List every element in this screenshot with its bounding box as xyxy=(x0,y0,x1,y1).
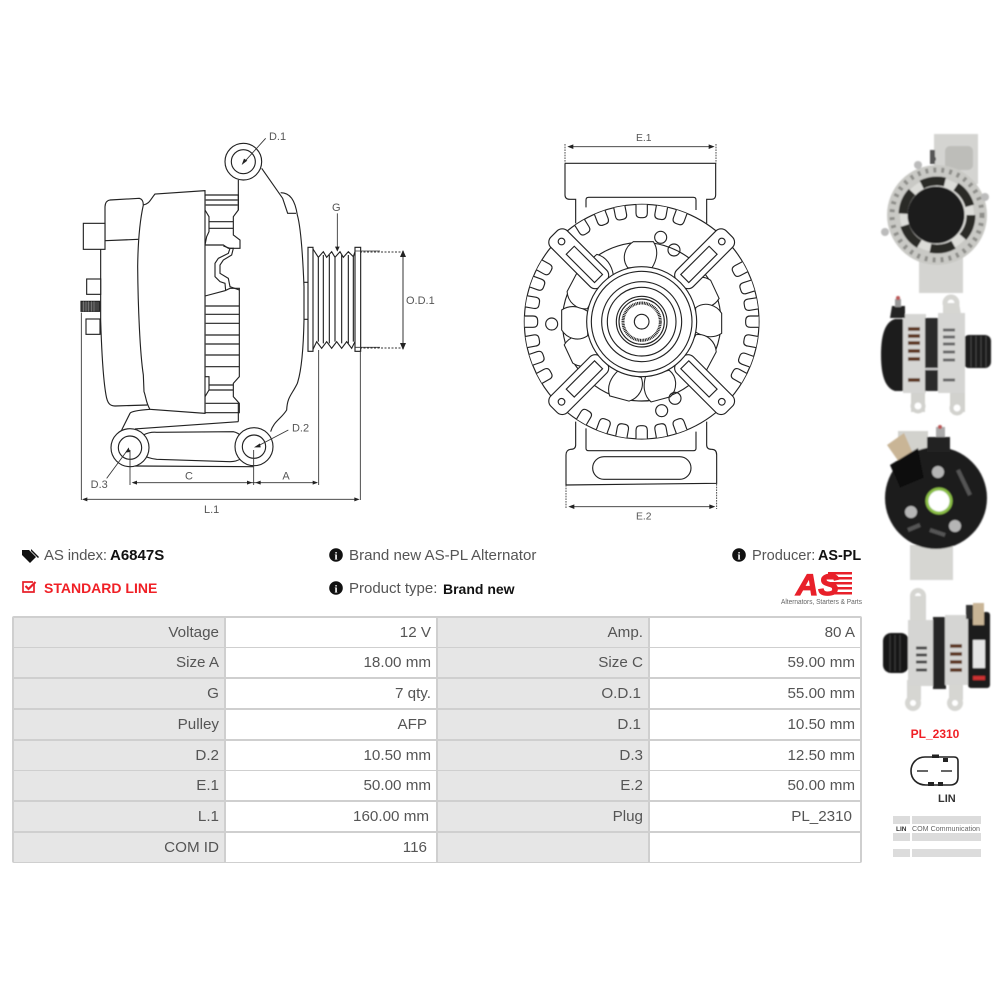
row: L.1 and plug: L.1 xyxy=(198,808,219,825)
side dimension labels: D.2 xyxy=(292,422,309,434)
icon: info product type: i xyxy=(334,584,338,596)
side dimension labels: D.1 xyxy=(269,131,286,143)
row: voltage and amperage: 12 V xyxy=(400,624,431,640)
product type xyxy=(349,580,515,597)
E.2 dimension: E.2 xyxy=(636,511,652,522)
side dimension labels xyxy=(91,131,341,516)
four mounting arms xyxy=(546,226,738,418)
rear cover xyxy=(101,198,147,406)
row: pulley and D.1: Pulley xyxy=(178,716,219,733)
row: E.1 and E.2 xyxy=(14,771,860,800)
pin function table: COM Communication xyxy=(912,824,980,833)
brand note: Brand new AS-PL Alternator xyxy=(349,547,536,564)
front view technical drawing xyxy=(524,133,759,522)
rear housing xyxy=(138,191,205,413)
logo: AS-PL: AS xyxy=(795,569,839,602)
photo: alternator opposite side view xyxy=(883,588,990,711)
dimension arrowheads xyxy=(82,159,360,501)
row: E.1 and E.2: 50.00 mm xyxy=(787,777,855,794)
row: pulley and D.1 xyxy=(14,710,860,739)
mounting eye D.3 xyxy=(111,429,149,467)
pulley xyxy=(304,247,361,351)
E.1 dimension: E.1 xyxy=(636,133,652,144)
logo: AS-PL: Alternators, Starters & Parts xyxy=(781,599,862,606)
side dimensions xyxy=(81,138,380,500)
row: pulley and D.1: D.1 xyxy=(617,716,641,733)
AS index xyxy=(44,547,164,564)
mounting eye D.1 xyxy=(225,143,262,180)
row: pulley and D.1: 10.50 mm xyxy=(787,716,855,733)
pin function table xyxy=(893,816,981,857)
plug pin label: LIN xyxy=(938,793,956,805)
row: pulley and D.1: AFP xyxy=(397,716,427,733)
row: E.1 and E.2: E.1 xyxy=(196,777,219,794)
mounting eye D.2 xyxy=(235,428,273,466)
row: D.2 and D.3 xyxy=(14,741,860,770)
row: voltage and amperage xyxy=(14,618,860,647)
row: voltage and amperage: Amp. xyxy=(608,624,643,640)
AS index: AS index: xyxy=(44,547,107,564)
stator fins xyxy=(205,195,240,413)
row: G and O.D.1: G xyxy=(207,685,219,702)
row: size A and size C: 59.00 mm xyxy=(787,654,855,671)
row: L.1 and plug xyxy=(14,802,860,831)
icon: info producer: i xyxy=(737,550,741,562)
E.1 dimension xyxy=(565,133,716,163)
row: L.1 and plug: Plug xyxy=(613,808,643,825)
row: E.1 and E.2: E.2 xyxy=(620,777,643,794)
row: size A and size C: 18.00 mm xyxy=(363,654,431,671)
end shield ring with notches xyxy=(524,204,759,439)
row: E.1 and E.2: 50.00 mm xyxy=(363,777,431,794)
specification table xyxy=(12,616,862,863)
front housing xyxy=(238,168,304,432)
bottom bracket xyxy=(566,422,717,485)
pulley hub circles xyxy=(587,267,697,377)
row: G and O.D.1: 55.00 mm xyxy=(787,685,855,702)
row: voltage and amperage: Voltage xyxy=(168,624,219,640)
row: D.2 and D.3: D.2 xyxy=(195,746,219,764)
ventilation holes xyxy=(546,231,681,417)
connectors and stud xyxy=(81,223,105,334)
icon: info producer xyxy=(732,548,746,562)
product type: Brand new xyxy=(443,581,515,597)
row: G and O.D.1: O.D.1 xyxy=(601,685,641,702)
O.D.1 dimension xyxy=(360,250,435,350)
row: size A and size C: Size A xyxy=(176,654,219,671)
row: COM ID: COM ID xyxy=(164,839,219,856)
row: size A and size C: Size C xyxy=(598,654,643,671)
pin function table: LIN xyxy=(896,826,907,833)
logo: AS-PL xyxy=(781,569,862,606)
icon: red checked box xyxy=(23,582,36,592)
row: D.2 and D.3: D.3 xyxy=(619,746,643,764)
side dimension labels: L.1 xyxy=(204,504,219,516)
side view technical drawing xyxy=(81,131,380,516)
photo: alternator rear view xyxy=(885,425,987,580)
side dimension labels: C xyxy=(185,470,193,482)
row: L.1 and plug: 160.00 mm xyxy=(353,808,429,825)
side dimension labels: D.3 xyxy=(91,479,108,491)
top bracket xyxy=(565,163,716,223)
row: D.2 and D.3: 10.50 mm xyxy=(363,746,431,764)
row: L.1 and plug: PL_2310 xyxy=(791,808,852,825)
E.2 dimension xyxy=(566,484,717,522)
fan window and blades xyxy=(562,242,722,403)
lower bracket xyxy=(122,409,253,467)
row: G and O.D.1: 7 qty. xyxy=(395,685,431,702)
row: voltage and amperage: 80 A xyxy=(825,624,855,640)
O.D.1 dimension: O.D.1 xyxy=(406,295,435,307)
row: COM ID: 116 xyxy=(403,839,427,856)
side dimension labels: A xyxy=(282,470,290,482)
AS index: A6847S xyxy=(110,547,164,564)
row: COM ID xyxy=(14,833,860,862)
row: D.2 and D.3: 12.50 mm xyxy=(787,746,855,764)
icon: tags xyxy=(22,549,39,563)
producer: Producer: xyxy=(752,548,815,564)
row: size A and size C xyxy=(14,648,860,677)
standard line: STANDARD LINE xyxy=(44,580,157,596)
icon: info brand: i xyxy=(334,550,338,562)
icon: info brand xyxy=(329,548,343,562)
side dimension labels: G xyxy=(332,202,341,214)
plug code: PL_2310 xyxy=(911,727,960,741)
photo: alternator side view xyxy=(881,294,991,416)
producer xyxy=(752,548,861,564)
row: G and O.D.1 xyxy=(14,679,860,708)
product type: Product type: xyxy=(349,580,437,597)
icon: plug connector xyxy=(911,754,958,786)
photo: alternator pulley end xyxy=(881,134,989,293)
icon: info product type xyxy=(329,581,343,596)
producer: AS-PL xyxy=(818,548,861,564)
